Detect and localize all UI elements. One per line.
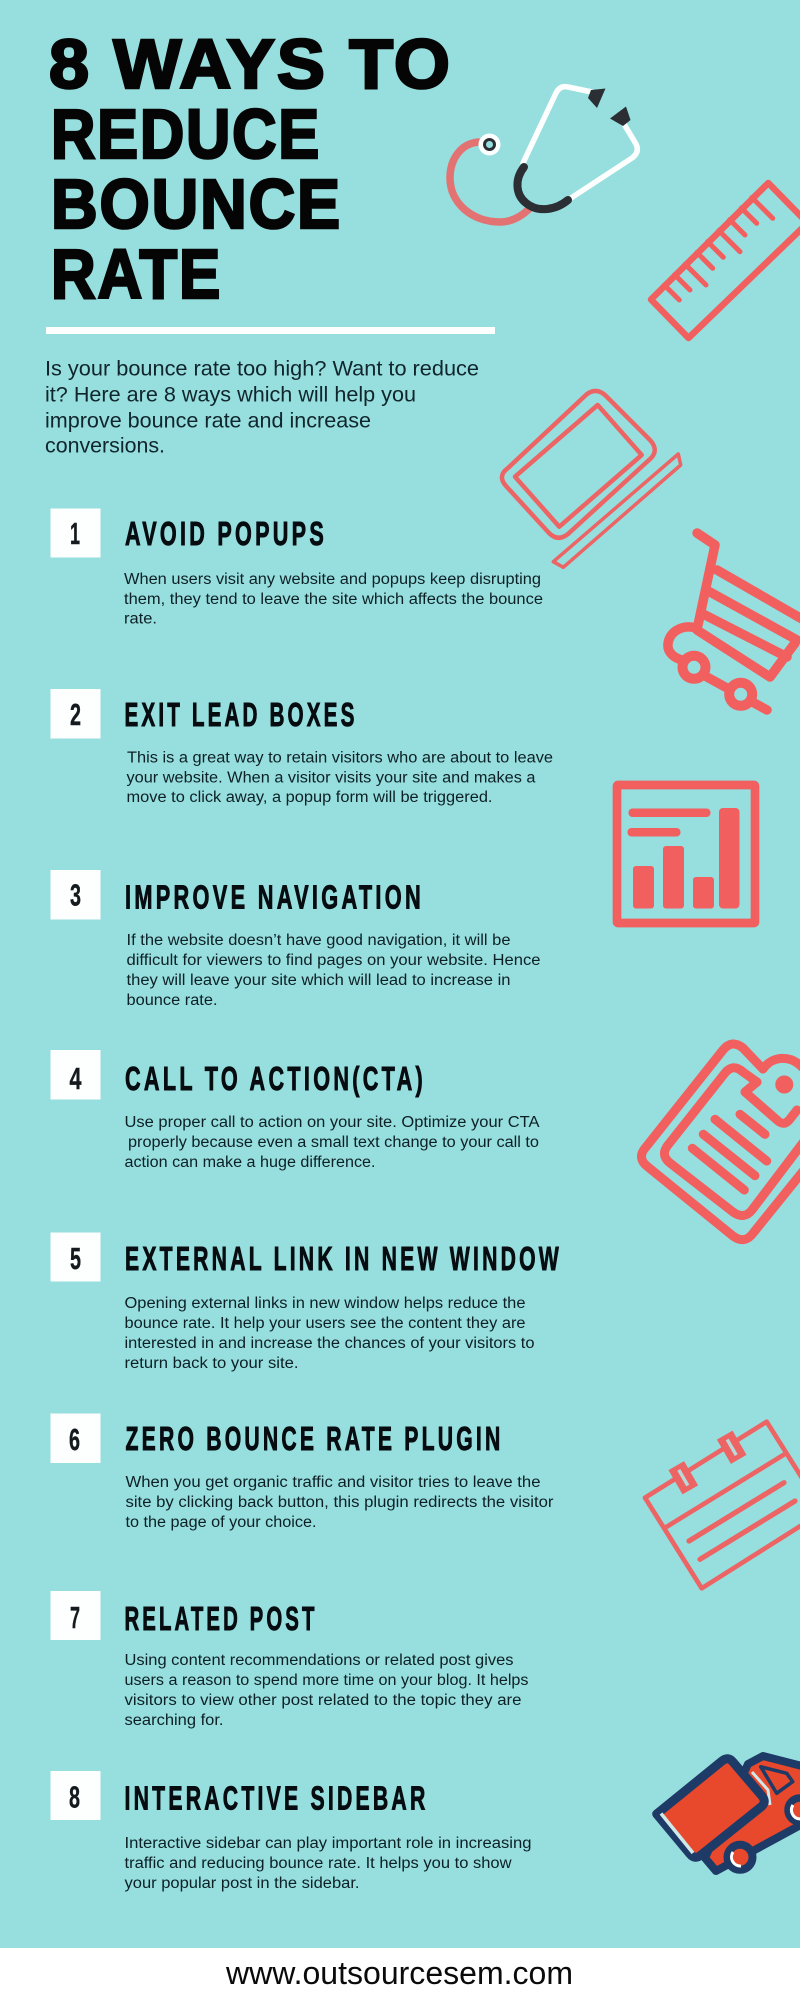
- number box 8: [50, 1771, 100, 1820]
- item 5: external link: [50, 1232, 562, 1372]
- number box 2: 2: [70, 697, 81, 732]
- icon: calendar: [645, 1422, 800, 1588]
- body 7: Using content recommendations or related post gives: [124, 1652, 514, 1669]
- calendar binder clip left: [669, 1461, 698, 1494]
- body 1: When users visit any website and popups keep disrupting: [124, 571, 541, 588]
- item 1: avoid popups: [50, 508, 543, 628]
- heading 3: IMPROVE NAVIGATION: [125, 878, 424, 916]
- body 1: rate.: [124, 610, 157, 628]
- intro text: [45, 358, 479, 458]
- number box 6: 6: [69, 1422, 80, 1457]
- title: 8 WAYS TO: [49, 25, 452, 103]
- title: RATE: [51, 235, 222, 313]
- body 5: interested in and increase the chances of your visitors to: [124, 1335, 534, 1352]
- body 3: they will leave your site which will lead to increase in: [126, 972, 510, 989]
- body 4: properly because even a small text change to your call to: [128, 1134, 539, 1151]
- body 4: action can make a huge difference.: [124, 1154, 376, 1171]
- body 5: bounce rate. It help your users see the content they are: [124, 1315, 526, 1332]
- body 3: If the website doesn’t have good navigation, it will be: [126, 932, 510, 949]
- body 6: [126, 1474, 554, 1531]
- item 2: exit lead boxes: [50, 689, 553, 806]
- heading 5: EXTERNAL LINK IN NEW WINDOW: [125, 1240, 562, 1277]
- body 6: site by clicking back button, this plugin redirects the visitor: [126, 1494, 554, 1511]
- body 3: [126, 932, 540, 1009]
- heading 1: AVOID POPUPS: [125, 515, 327, 552]
- body 3: bounce rate.: [126, 992, 218, 1009]
- body 2: move to click away, a popup form will be triggered.: [126, 789, 492, 806]
- body 5: Opening external links in new window helps reduce the: [124, 1295, 526, 1312]
- item 3: improve navigation: [50, 870, 540, 1009]
- number box 4: [50, 1050, 100, 1100]
- title: BOUNCE: [51, 165, 342, 243]
- icon: clipboard: [641, 1044, 800, 1240]
- intro text: Is your bounce rate too high? Want to reduce: [45, 358, 479, 380]
- body 8: traffic and reducing bounce rate. It helps you to show: [124, 1855, 512, 1872]
- heading 8: INTERACTIVE SIDEBAR: [124, 1780, 428, 1816]
- footer bar: [0, 1948, 800, 2000]
- number box 1: [50, 508, 100, 558]
- body 2: This is a great way to retain visitors who are about to leave: [127, 750, 553, 766]
- body 1: [124, 571, 543, 628]
- item 4: call to action: [50, 1050, 540, 1171]
- item 8: interactive sidebar: [50, 1771, 532, 1892]
- icon: stethoscope: [450, 87, 637, 222]
- heading 2: EXIT LEAD BOXES: [124, 696, 358, 733]
- intro text: conversions.: [45, 434, 165, 458]
- footer url: www.outsourcesem.com: [225, 1955, 573, 1991]
- body 5: return back to your site.: [124, 1355, 298, 1372]
- body 3: difficult for viewers to find pages on your website. Hence: [126, 952, 540, 969]
- icon: bar chart report: [617, 785, 755, 923]
- body 5: [124, 1295, 534, 1372]
- number box 7: [50, 1591, 100, 1640]
- number box 1: 1: [70, 516, 80, 551]
- title: [49, 25, 452, 313]
- item 6: zero bounce rate plugin: [50, 1414, 554, 1531]
- item 7: related post: [50, 1591, 529, 1729]
- icon: ruler: [651, 183, 800, 338]
- body 8: your popular post in the sidebar.: [124, 1875, 360, 1892]
- icon: delivery truck: [657, 1756, 800, 1871]
- intro text: it? Here are 8 ways which will help you: [45, 384, 416, 406]
- number box 5: 5: [70, 1241, 81, 1276]
- body 8: [124, 1835, 532, 1892]
- body 6: When you get organic traffic and visitor tries to leave the: [126, 1474, 540, 1491]
- title underline: [46, 327, 495, 334]
- calendar binder clip right: [717, 1431, 746, 1464]
- body 2: your website. When a visitor visits your site and makes a: [126, 770, 536, 786]
- icon: shopping cart: [668, 533, 800, 710]
- body 7: visitors to view other post related to the topic they are: [124, 1692, 522, 1709]
- number box 8: 8: [69, 1780, 80, 1814]
- number box 5: [50, 1232, 100, 1282]
- body 4: [124, 1114, 540, 1171]
- body 7: searching for.: [124, 1712, 224, 1729]
- intro text: improve bounce rate and increase: [45, 410, 371, 432]
- number box 2: [50, 689, 100, 738]
- number box 3: [50, 870, 100, 920]
- number box 3: 3: [70, 878, 81, 912]
- number box 6: [50, 1414, 100, 1463]
- heading 6: ZERO BOUNCE RATE PLUGIN: [126, 1420, 504, 1457]
- body 4: Use proper call to action on your site. Optimize your CTA: [124, 1114, 540, 1131]
- number box 7: 7: [70, 1600, 80, 1635]
- body 7: users a reason to spend more time on your blog. It helps: [124, 1672, 529, 1689]
- title: REDUCE: [51, 95, 321, 173]
- body 8: Interactive sidebar can play important role in increasing: [124, 1835, 532, 1852]
- body 7: [124, 1652, 529, 1729]
- icon: laptop: [502, 391, 681, 567]
- body 6: to the page of your choice.: [126, 1514, 316, 1531]
- body 1: them, they tend to leave the site which affects the bounce: [124, 591, 543, 608]
- body 2: [126, 750, 553, 806]
- number box 4: 4: [70, 1061, 82, 1096]
- heading 4: CALL TO ACTION(CTA): [125, 1060, 426, 1097]
- heading 7: RELATED POST: [124, 1600, 318, 1637]
